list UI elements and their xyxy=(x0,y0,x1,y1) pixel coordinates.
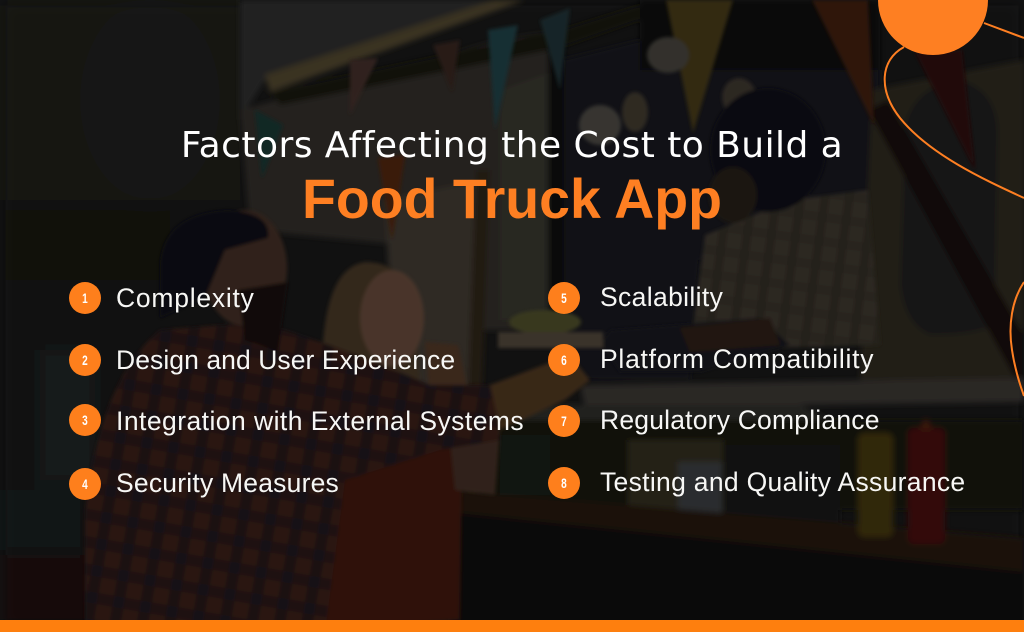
man head xyxy=(203,210,287,326)
title highlight: Food Truck App xyxy=(302,167,722,230)
text: Platform Compatibility xyxy=(600,344,874,374)
navy panel xyxy=(560,0,880,380)
item 2 xyxy=(69,344,455,376)
text: Complexity xyxy=(116,283,255,313)
awning xyxy=(240,0,520,120)
text: Security Measures xyxy=(116,468,339,498)
orange circle top right xyxy=(878,0,988,55)
counter xyxy=(580,378,1024,408)
orange curved lines xyxy=(885,23,1024,396)
light bulbs xyxy=(647,37,689,73)
bottom orange bar xyxy=(0,620,1024,632)
title line: Factors Affecting the Cost to Build a xyxy=(181,125,843,166)
man shirt xyxy=(85,322,500,632)
posts xyxy=(464,170,490,500)
text: 6 xyxy=(561,352,567,368)
text: 7 xyxy=(561,413,567,429)
item 6 xyxy=(548,344,874,376)
awning beam xyxy=(265,0,525,92)
text: 5 xyxy=(561,290,567,306)
bottles xyxy=(858,433,893,537)
item 5 xyxy=(548,282,723,314)
text: 1 xyxy=(82,290,88,306)
item 1 xyxy=(69,282,255,314)
text: 3 xyxy=(82,412,88,428)
man arm xyxy=(490,355,590,430)
food tray xyxy=(509,310,581,334)
text: 8 xyxy=(561,475,567,491)
right truck frame xyxy=(860,60,1024,380)
text: Scalability xyxy=(600,282,723,312)
text: 2 xyxy=(82,352,88,368)
woman xyxy=(322,262,420,420)
text: Testing and Quality Assurance xyxy=(600,467,965,497)
item 8 xyxy=(548,467,965,499)
bunting flags xyxy=(255,110,283,178)
item 7 xyxy=(548,405,880,437)
text: Regulatory Compliance xyxy=(600,405,880,435)
vendor xyxy=(690,190,880,350)
text: Design and User Experience xyxy=(116,345,455,375)
item 4 xyxy=(69,468,339,500)
text: Integration with External Systems xyxy=(116,406,524,436)
strut xyxy=(868,100,1024,395)
item 3 xyxy=(69,404,524,436)
text: 4 xyxy=(82,476,88,492)
